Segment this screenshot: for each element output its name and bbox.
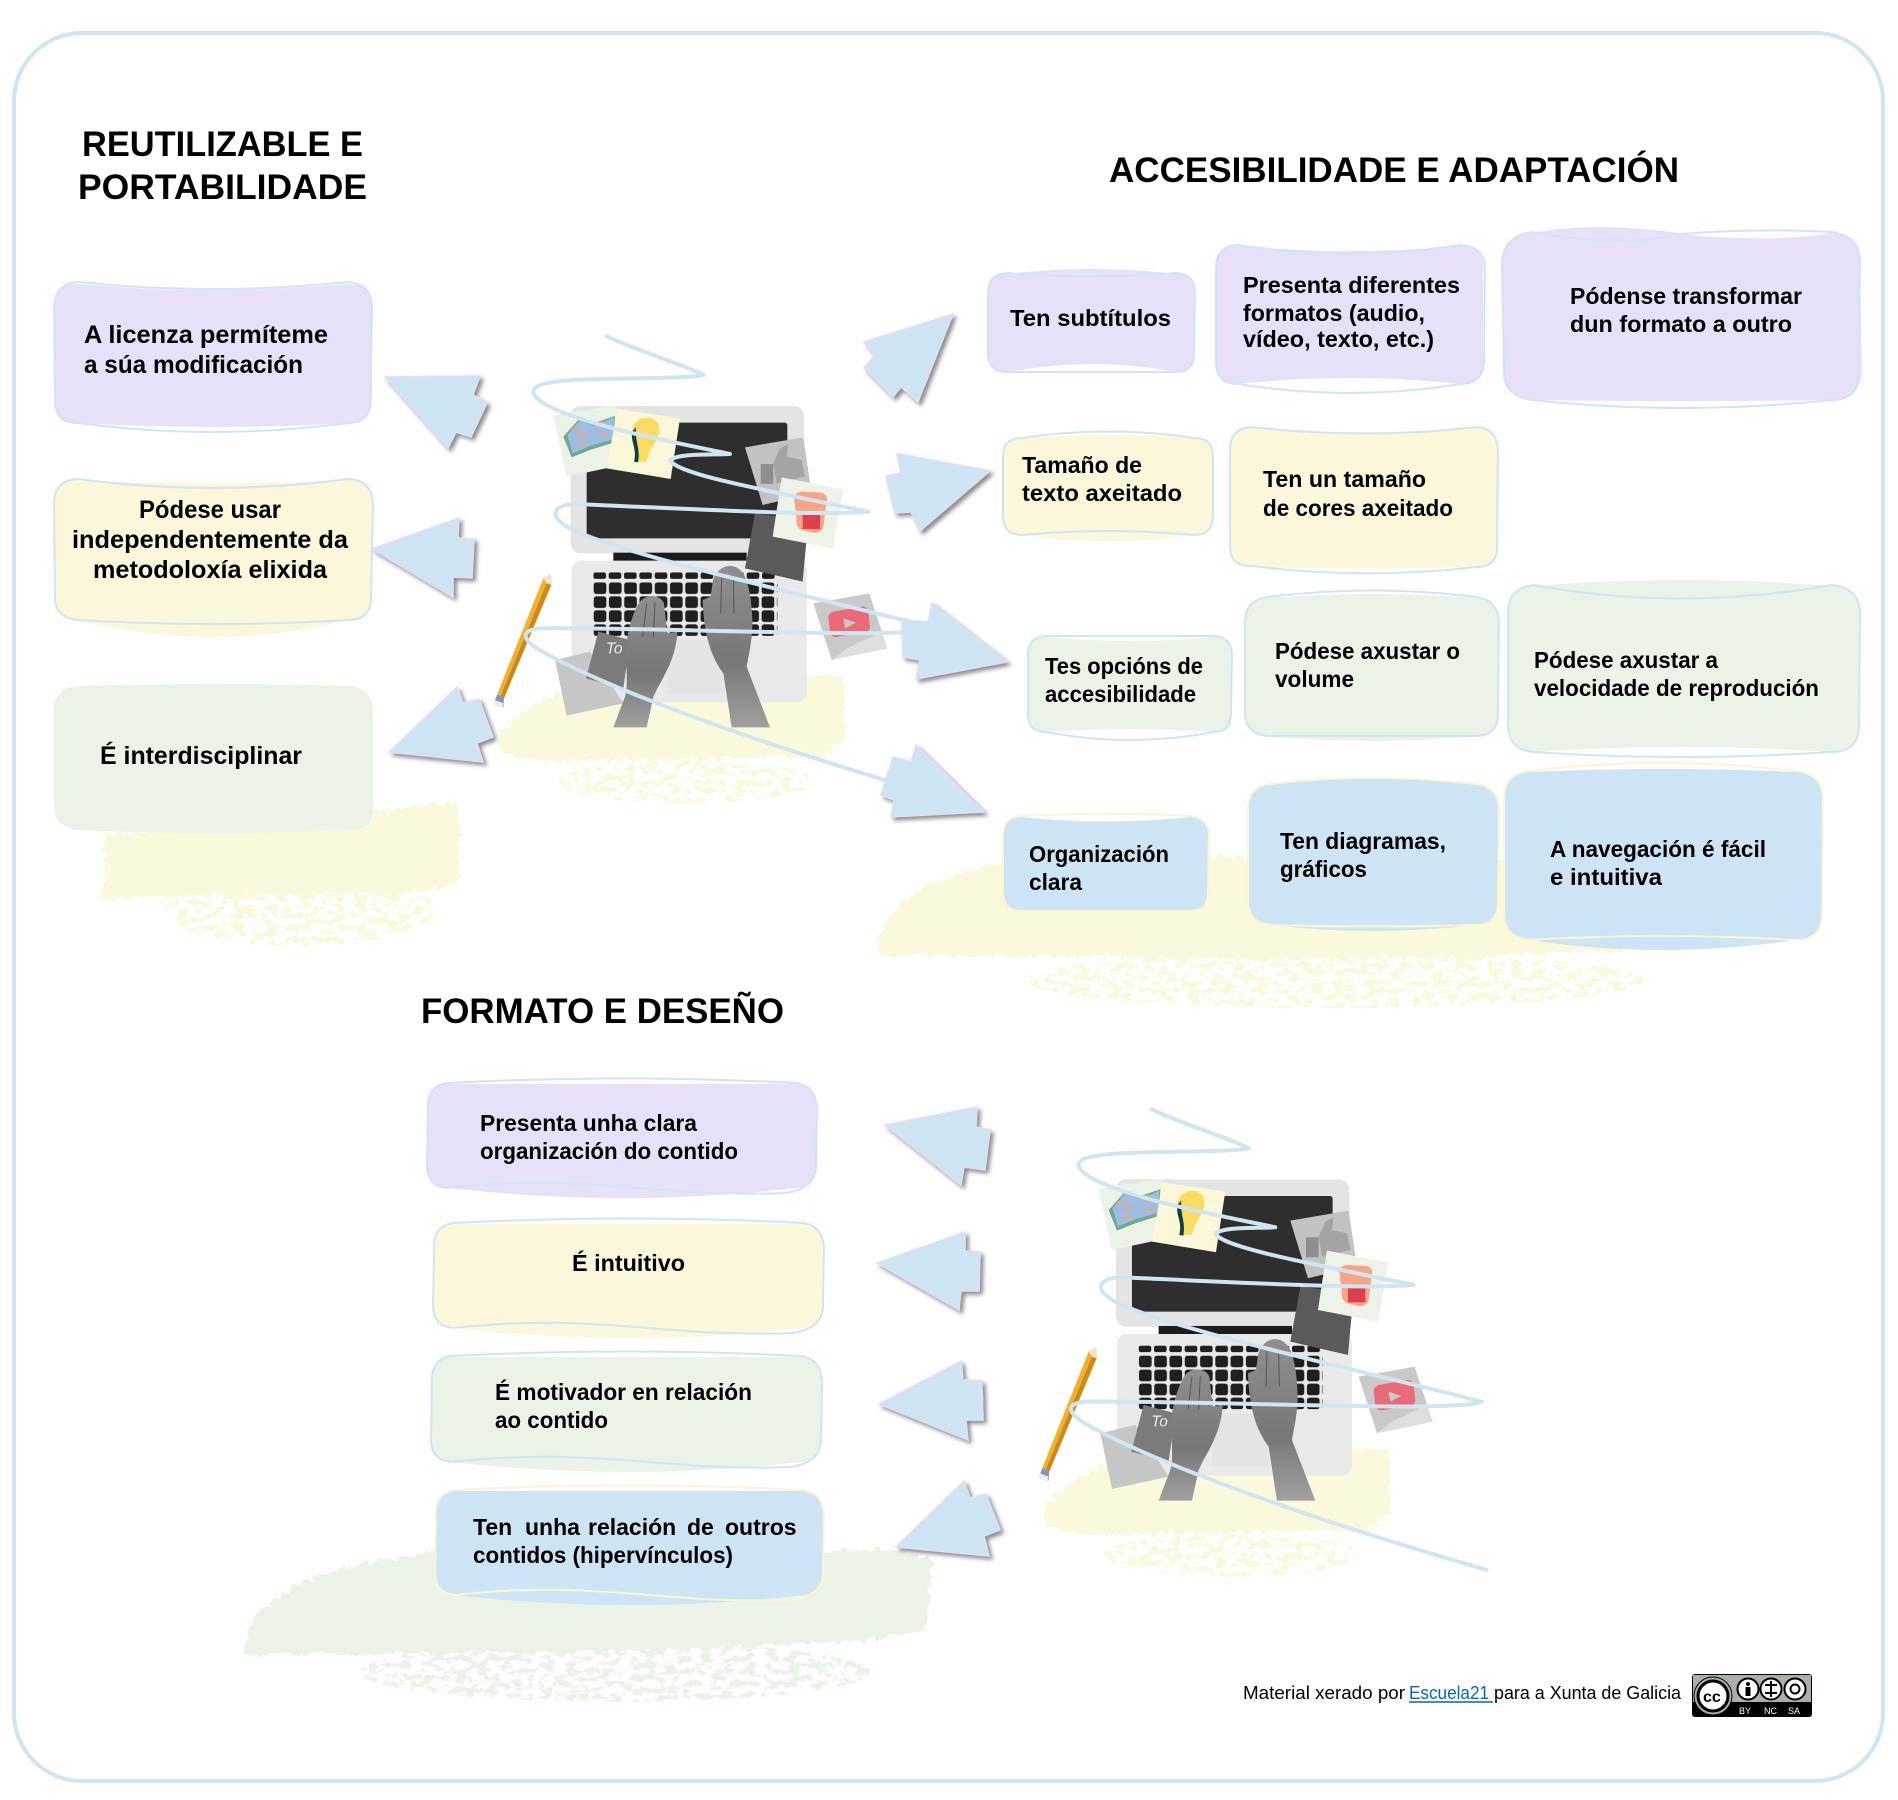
heading: reutilizable e portabilidade: PORTABILIDADE bbox=[78, 168, 367, 207]
footer credit bbox=[1243, 1683, 1682, 1703]
box: ten unha relación: Ten bbox=[473, 1514, 512, 1540]
arrows: formato bbox=[877, 1107, 1000, 1556]
box: é interdisciplinar: É interdisciplinar bbox=[100, 741, 302, 770]
box: a licenza: A licenza permíteme bbox=[84, 321, 328, 349]
box: a navegación é fácil: e intuitiva bbox=[1550, 864, 1662, 890]
brush stroke: right yellow bbox=[878, 855, 1645, 1008]
box: a navegación é fácil bbox=[1504, 763, 1823, 950]
icon: creative commons badge: BY bbox=[1739, 1706, 1751, 1716]
footer credit: Material xerado por bbox=[1243, 1683, 1405, 1703]
box: ten unha relación: contidos (hipervínculos) bbox=[473, 1542, 733, 1568]
box: presenta diferentes formatos: Presenta diferentes bbox=[1243, 272, 1460, 298]
box: presenta diferentes formatos: formatos (audio, bbox=[1243, 300, 1425, 326]
box: tamaño de texto bbox=[1003, 432, 1213, 541]
box: pódese usar bbox=[54, 479, 373, 637]
box: ten unha relación: unha bbox=[525, 1514, 580, 1540]
icon: creative commons badge: SA bbox=[1788, 1706, 1800, 1716]
box: ten unha relación bbox=[435, 1486, 824, 1605]
box: pódense transformar: dun formato a outro bbox=[1570, 311, 1792, 337]
box: ten diagramas, gráficos: gráficos bbox=[1280, 856, 1367, 882]
box: pódese axustar o volume: Pódese axustar o bbox=[1275, 638, 1460, 664]
box: é intuitivo: É intuitivo bbox=[572, 1249, 685, 1276]
brush stroke: left yellow bbox=[102, 802, 460, 946]
heading: accesibilidade e adaptación: ACCESIBILIDADE E ADAPTACIÓN bbox=[1109, 150, 1679, 190]
arrows: reutilizable bbox=[372, 376, 493, 762]
box: tamaño de texto: texto axeitado bbox=[1022, 480, 1182, 506]
illustration: laptop bottom: To bbox=[1151, 1414, 1168, 1431]
box: presenta diferentes formatos: vídeo, texto, etc.) bbox=[1243, 326, 1434, 352]
box: é intuitivo bbox=[433, 1218, 824, 1338]
box: ten diagramas, gráficos: Ten diagramas, bbox=[1280, 828, 1446, 854]
box: presenta unha clara organización bbox=[427, 1078, 817, 1198]
box: ten subtítulos: Ten subtítulos bbox=[1010, 305, 1171, 331]
footer credit: Escuela21 bbox=[1409, 1683, 1489, 1703]
heading: formato e deseño: FORMATO E DESEÑO bbox=[421, 992, 784, 1031]
box: ten un tamaño de cores: Ten un tamaño bbox=[1263, 466, 1426, 492]
box: é motivador bbox=[431, 1352, 822, 1472]
box: pódese usar: metodoloxía elixida bbox=[93, 556, 328, 584]
heading: reutilizable e portabilidade bbox=[78, 125, 367, 207]
box: ten unha relación: relación bbox=[588, 1514, 676, 1540]
box: ten un tamaño de cores bbox=[1230, 427, 1498, 573]
icon: creative commons badge: NC bbox=[1764, 1706, 1777, 1716]
box: ten diagramas, gráficos bbox=[1248, 778, 1499, 931]
box: pódense transformar bbox=[1502, 227, 1862, 408]
illustration: laptop bottom bbox=[1038, 1109, 1487, 1577]
box: pódese axustar o volume: volume bbox=[1275, 666, 1354, 692]
box: tamaño de texto: Tamaño de bbox=[1022, 452, 1142, 478]
box: organización clara bbox=[1003, 814, 1209, 912]
box: ten un tamaño de cores: de cores axeitado bbox=[1263, 495, 1453, 521]
box: é interdisciplinar bbox=[54, 684, 373, 833]
box: pódese usar: Pódese usar bbox=[139, 496, 281, 524]
box: pódense transformar: Pódense transformar bbox=[1570, 283, 1802, 309]
box: tes opcións de accesibilidade bbox=[1028, 636, 1232, 740]
box: organización clara: clara bbox=[1029, 869, 1082, 895]
icon: creative commons badge: cc bbox=[1703, 1689, 1721, 1706]
box: ten subtítulos bbox=[988, 269, 1195, 372]
box: organización clara: Organización bbox=[1029, 841, 1169, 867]
box: a licenza bbox=[54, 282, 372, 432]
icon: creative commons badge bbox=[1692, 1674, 1812, 1717]
illustration: laptop top: To bbox=[606, 640, 623, 657]
box: ten unha relación: de bbox=[687, 1514, 714, 1540]
box: pódese axustar a velocidade: Pódese axustar a bbox=[1534, 647, 1718, 673]
heading: reutilizable e portabilidade: REUTILIZABLE E bbox=[82, 125, 363, 164]
box: tes opcións de accesibilidade: Tes opcións de bbox=[1045, 653, 1203, 679]
footer credit: para a Xunta de Galicia bbox=[1494, 1683, 1682, 1703]
box: pódese usar: independentemente da bbox=[72, 526, 349, 554]
box: pódese axustar a velocidade bbox=[1508, 580, 1860, 757]
box: ten unha relación: outros bbox=[725, 1514, 797, 1540]
box: pódese axustar o volume bbox=[1245, 590, 1499, 741]
arrows: accesibilidade bbox=[864, 314, 1007, 817]
box: é motivador: É motivador en relación bbox=[495, 1378, 752, 1405]
brush stroke: bottom green bbox=[245, 1550, 933, 1702]
box: é motivador: ao contido bbox=[495, 1407, 608, 1433]
illustration: laptop top bbox=[493, 336, 941, 803]
box: tes opcións de accesibilidade: accesibilidade bbox=[1045, 681, 1196, 707]
box: pódese axustar a velocidade: velocidade de reprodución bbox=[1534, 675, 1819, 701]
box: a licenza: a súa modificación bbox=[84, 351, 303, 379]
box: presenta unha clara organización: Presenta unha clara bbox=[480, 1110, 697, 1136]
box: a navegación é fácil: A navegación é fácil bbox=[1550, 836, 1766, 862]
box: presenta diferentes formatos bbox=[1216, 245, 1485, 393]
box: presenta unha clara organización: organización do contido bbox=[480, 1138, 738, 1164]
